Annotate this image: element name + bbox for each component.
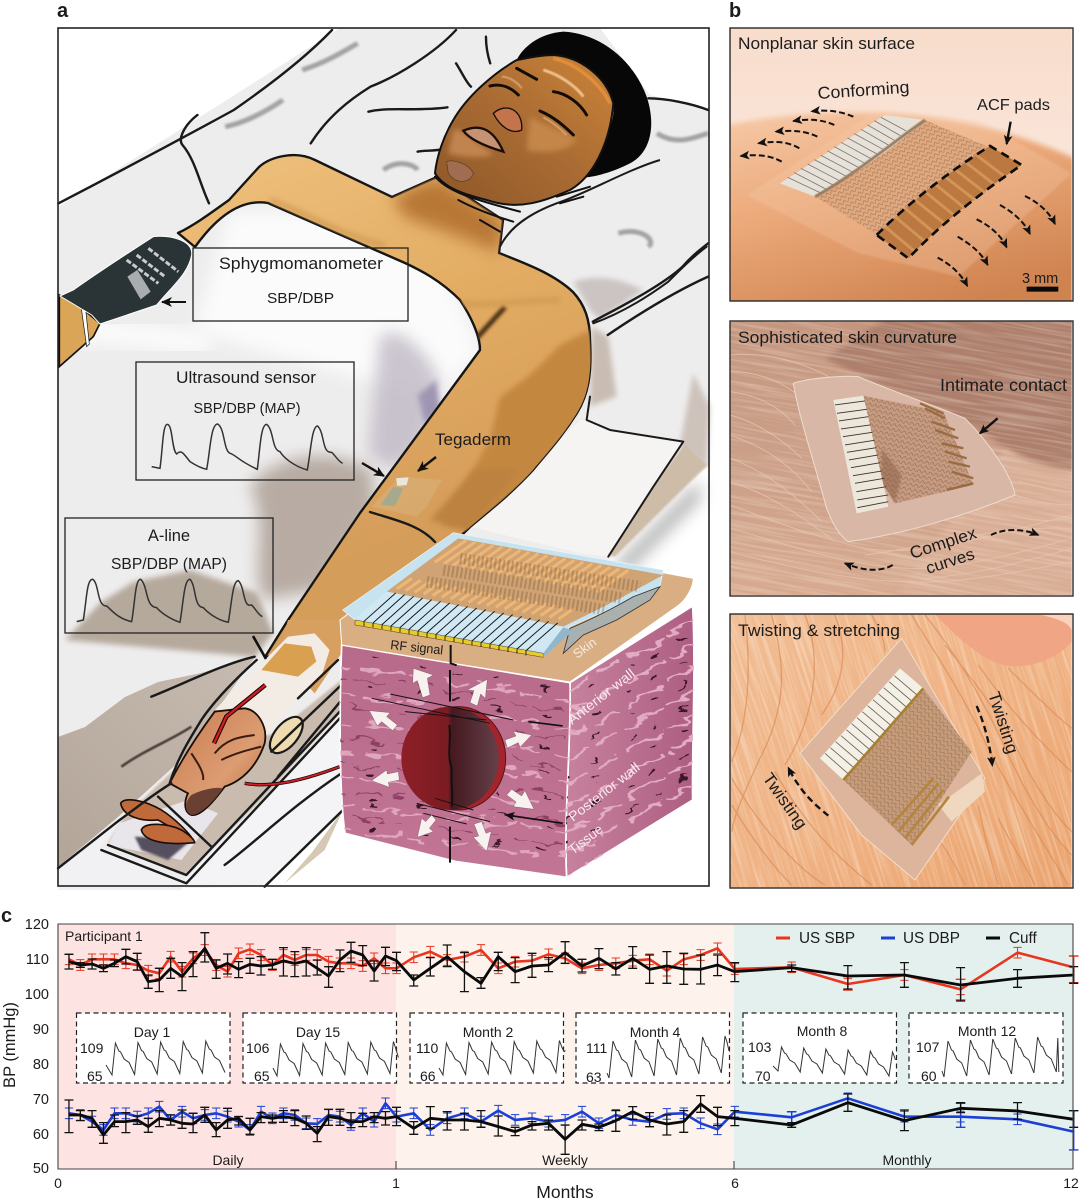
callout: ultrasound sensor: SBP/DBP (MAP) [194, 401, 300, 417]
skin streak texture [730, 614, 1072, 887]
wall pointer arrows [506, 722, 563, 823]
phase label: monthly: Monthly [882, 1152, 932, 1168]
pillow and bed fold lines [59, 30, 708, 335]
label: Twisting right: Twisting [984, 689, 1022, 756]
x axis tick labels: 6 [731, 1175, 739, 1191]
cheeks [527, 117, 577, 152]
arrow: to cuff [162, 301, 186, 303]
legend: Cuff [1009, 930, 1038, 947]
inset: Day 15 [243, 1013, 398, 1084]
RF signal line [450, 645, 457, 863]
inset: Month 2: 110 [416, 1040, 439, 1056]
inset: Day 15: 106 [246, 1040, 270, 1056]
white expansion arrows [369, 668, 534, 851]
twisting arrows [977, 706, 992, 766]
tissue fibre texture front [340, 656, 570, 858]
panel a frame [58, 28, 709, 886]
y axis tick labels: 60 [33, 1127, 49, 1143]
3 mm scale bar [1027, 287, 1058, 292]
callout: ultrasound sensor [136, 362, 354, 480]
nose [493, 108, 522, 131]
inset: Day 1: 109 [80, 1040, 104, 1056]
panel label c: c [1, 905, 12, 927]
callout: A-line: A-line [148, 527, 190, 545]
cube label: Tissue: Tissue [566, 821, 606, 857]
callout: A-line [65, 518, 273, 633]
sensor patch on arm [372, 477, 442, 517]
thumb [935, 614, 1072, 666]
inset: Month 8 [743, 1013, 896, 1084]
board lines [58, 657, 343, 887]
inset: Month 4 [576, 1013, 730, 1085]
mesh region [815, 120, 992, 258]
callout: sphygmomanometer: Sphygmomanometer [219, 254, 383, 273]
tissue cube schematic [330, 533, 703, 880]
US SBP series [69, 948, 1079, 1000]
inset: Day 1: Day 1 [134, 1024, 170, 1040]
tissue fibre texture right [566, 619, 694, 877]
skin lines [730, 354, 1072, 582]
arm crease lines [370, 512, 435, 542]
electrode strip [780, 115, 925, 197]
legend [776, 930, 1038, 947]
inset: Month 12 [909, 1013, 1063, 1084]
label: 3 mm: 3 mm [1022, 271, 1058, 287]
callout: ultrasound sensor: Ultrasound sensor [176, 368, 316, 387]
inset: Month 12: 60 [921, 1068, 937, 1084]
forearm, hand and arm board [58, 620, 343, 890]
electrode strip [833, 396, 888, 513]
anterior and posterior wall lines [372, 694, 513, 824]
photo panel: twisting and stretching [729, 613, 1074, 889]
label: Tegaderm: Tegaderm [435, 431, 511, 449]
panel label b: b [729, 0, 741, 22]
photo panel: nonplanar skin surface [729, 27, 1074, 302]
contact pointer arrow [980, 418, 998, 433]
vessel lumen [411, 707, 506, 810]
adhesive film [747, 110, 1072, 277]
data series with error bars [64, 933, 1079, 1154]
callout: A-line: SBP/DBP (MAP) [111, 556, 227, 573]
serpentine mesh [387, 538, 663, 627]
arrow: to Tegaderm [418, 457, 436, 471]
x axis tick labels: 12 [1063, 1175, 1079, 1191]
y axis tick labels: 70 [33, 1092, 49, 1108]
catheter tube [214, 685, 265, 743]
right sheet shading [470, 278, 710, 557]
x axis tick labels: 0 [54, 1175, 62, 1191]
adhesive film [800, 638, 985, 880]
skin top layer [340, 533, 693, 682]
US DBP series [69, 1098, 1079, 1150]
mesh [863, 396, 973, 503]
inset: Month 4: 63 [586, 1069, 602, 1085]
mesh [843, 688, 972, 845]
transparent film [343, 533, 663, 657]
arterial line wire [245, 767, 340, 785]
inset: Month 2: Month 2 [463, 1024, 514, 1040]
face [435, 55, 613, 205]
label: curves: curves [924, 545, 977, 578]
blood pressure cuff [59, 236, 192, 367]
photo artwork [730, 322, 1072, 595]
jaw and neck lines [435, 177, 590, 232]
pads [892, 778, 949, 845]
arrow: to ultrasound sensor [362, 463, 384, 476]
participant label: Participant 1 [65, 928, 143, 944]
cube front face [340, 645, 570, 877]
inset: Day 15: Day 15 [296, 1024, 340, 1040]
x axis tick labels: 1 [392, 1175, 400, 1191]
legend: US SBP [799, 930, 855, 947]
inset: Day 15: 65 [254, 1068, 270, 1084]
skin shading [730, 322, 1072, 595]
palm lines [732, 615, 1072, 885]
eyebrows and closed eyes [490, 68, 587, 135]
callout: sphygmomanometer: SBP/DBP [267, 291, 334, 307]
inset: Month 2 [410, 1013, 565, 1084]
label: ACF pads: ACF pads [977, 97, 1050, 114]
sheet fold lines right [587, 247, 707, 557]
panel heading: Sophisticated skin curvature [738, 328, 957, 347]
callout: sphygmomanometer [193, 248, 408, 321]
panel frame [730, 614, 1073, 888]
y axis title: BP (mmHg) [1, 1002, 19, 1088]
y axis tick labels: 80 [33, 1057, 49, 1073]
torso and arm skin [178, 155, 600, 657]
panel frame [730, 28, 1073, 301]
y axis tick labels: 110 [26, 952, 49, 968]
photo artwork [730, 27, 1072, 300]
y axis tick labels [25, 917, 49, 1177]
forearm and tape [278, 620, 341, 693]
adhesive film [793, 376, 1015, 542]
inset: Month 8: 103 [748, 1039, 772, 1055]
inset: Day 1 [76, 1013, 230, 1084]
inset: Month 8: Month 8 [797, 1023, 848, 1039]
cube right face [566, 606, 694, 877]
inset: Month 12: 107 [916, 1039, 940, 1055]
shaded regions [58, 924, 1073, 1169]
arm and neck shading [270, 177, 600, 530]
panel c: blood pressure time series chart [1, 917, 1079, 1200]
right pillow edge [500, 160, 660, 247]
x axis tick labels [54, 1175, 1079, 1191]
panel heading: Nonplanar skin surface [738, 34, 915, 53]
inset: Month 4: 111 [586, 1040, 607, 1056]
cuff DBP line [69, 1103, 1074, 1139]
hand [170, 708, 265, 815]
label: Twisting left: Twisting [759, 769, 811, 833]
connector ribbon [563, 587, 660, 653]
electrode row [355, 592, 563, 652]
cuff SBP line [69, 948, 1074, 985]
ACF pointer arrow [1007, 122, 1011, 144]
lower sheet [185, 717, 343, 888]
cube label: Posterior wall: Posterior wall [566, 760, 643, 824]
plot frame [58, 924, 1073, 1169]
inset: Month 8: 70 [755, 1068, 771, 1084]
hair [517, 32, 651, 178]
cube label: Skin: Skin [570, 634, 599, 661]
forehead highlight [543, 70, 583, 97]
mouth [463, 128, 503, 152]
cuff error bars lower [64, 1094, 1078, 1154]
cube label: RF signal: RF signal [390, 637, 444, 658]
y axis tick labels: 90 [33, 1022, 49, 1038]
pads [920, 403, 973, 490]
head and pillow [435, 32, 660, 247]
photo artwork [730, 614, 1072, 888]
y axis tick labels: 120 [25, 917, 49, 933]
panel label a: a [57, 0, 69, 22]
pad under hand [264, 711, 309, 759]
phase label: daily: Daily [212, 1152, 244, 1168]
panel a background bedding [58, 28, 710, 886]
arrow: to wrist A-line [253, 636, 266, 659]
inset: Month 2: 66 [420, 1068, 436, 1084]
photo panel: sophisticated skin curvature [729, 320, 1074, 597]
ACF pads [877, 146, 1022, 258]
conforming dashed arrows [741, 111, 1055, 286]
y axis tick labels: 100 [25, 987, 49, 1003]
shadow and fingers [135, 837, 191, 860]
phase label: weekly: Weekly [542, 1152, 588, 1168]
panel heading: Twisting & stretching [738, 621, 900, 640]
inset: Day 1: 65 [87, 1068, 103, 1084]
chin [447, 161, 473, 181]
A-line waveform [77, 579, 262, 622]
panel a: patient illustration [58, 28, 710, 890]
legend: US DBP [903, 930, 960, 947]
mesh tracks [397, 540, 629, 619]
brown sheet shadow [250, 456, 375, 600]
inset: Month 4: Month 4 [630, 1024, 681, 1040]
electrode strip [820, 668, 923, 780]
y axis tick labels: 50 [33, 1161, 49, 1177]
skin dome [730, 110, 1072, 300]
panel frame [730, 321, 1073, 596]
inset: Month 12: Month 12 [958, 1023, 1016, 1039]
cuff error bars upper [64, 933, 1078, 1001]
label: Intimate contact: Intimate contact [940, 375, 1067, 395]
ultrasound waveform [152, 424, 343, 470]
label: Conforming: Conforming [817, 78, 910, 103]
lavender sheet folds [368, 333, 440, 470]
cube label: Anterior wall: Anterior wall [565, 666, 638, 727]
complex curve arrows [991, 530, 1038, 535]
label: Complex: Complex [907, 523, 979, 563]
